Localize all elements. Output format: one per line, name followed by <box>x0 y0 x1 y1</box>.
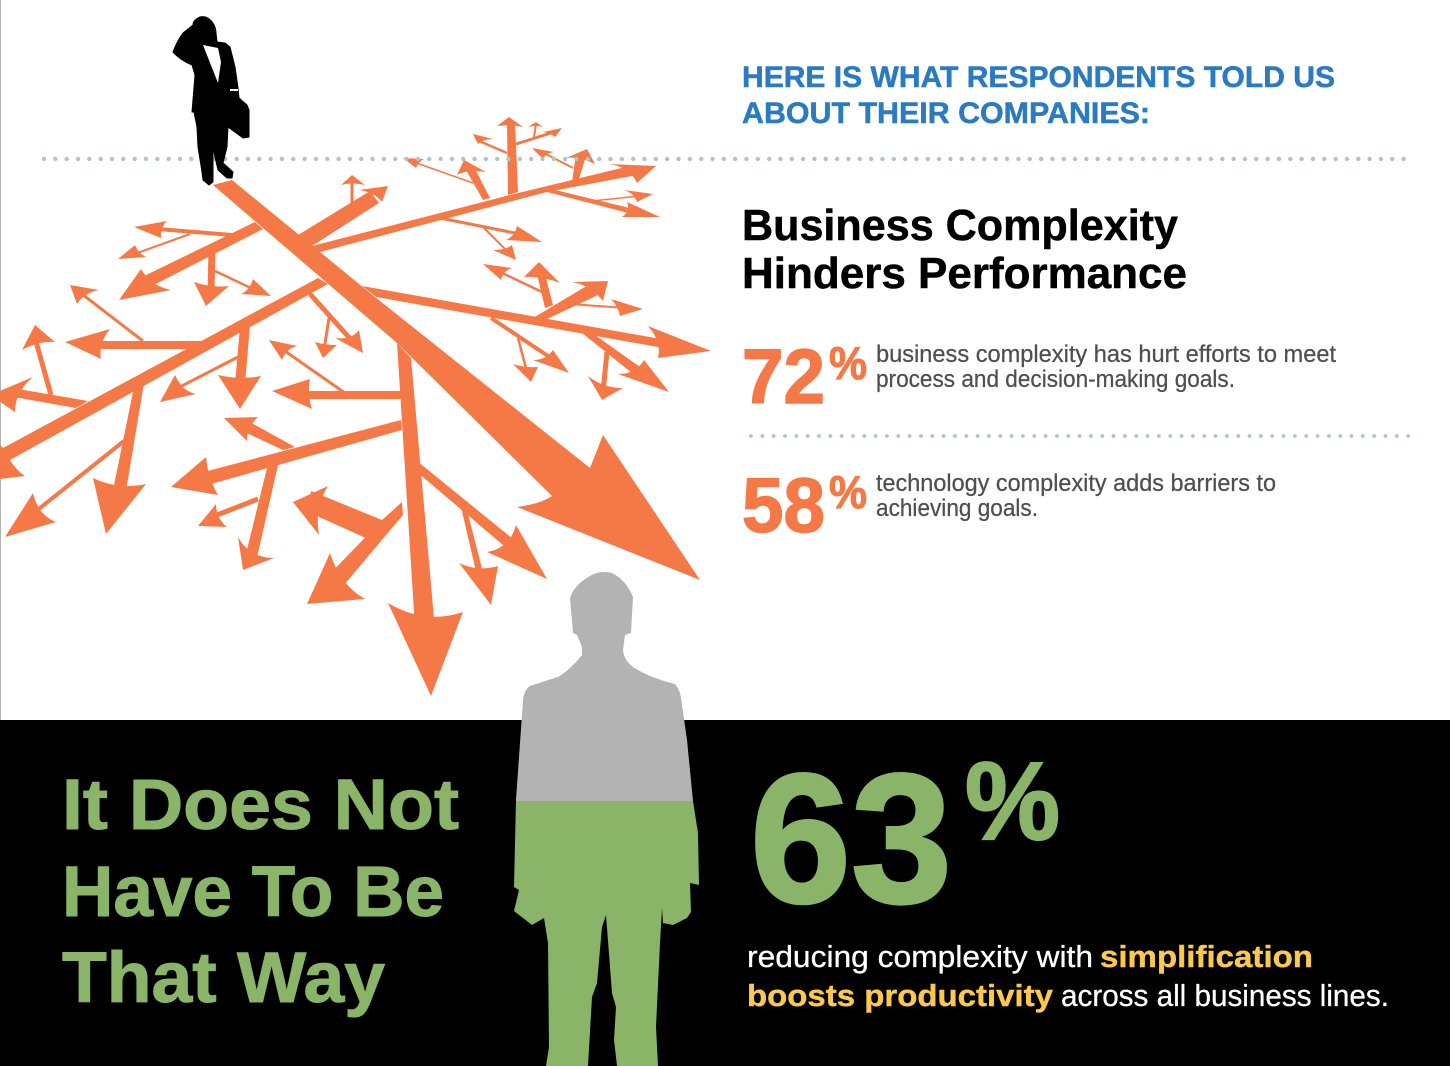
dotted divider middle <box>751 434 1410 438</box>
heading: respondents: ABOUT THEIR COMPANIES: <box>742 97 1150 130</box>
statistic: 63%: 63 <box>750 735 952 941</box>
heading: it does not have to be that way <box>62 766 459 1018</box>
right branch <box>362 262 711 400</box>
lower-middle small branch <box>310 294 363 358</box>
heading: it does not have to be that way: Have To Be <box>62 853 444 932</box>
statistic: 58%: % <box>829 466 867 518</box>
statistic: 72% <box>742 334 1336 420</box>
heading: it does not have to be that way: That Way <box>62 939 386 1018</box>
callout: simplification boosts productivity <box>747 939 1389 1013</box>
arrow tree <box>0 117 711 696</box>
heading: it does not have to be that way: It Does Not <box>62 766 459 845</box>
callout: simplification boosts productivity: reducing complexity with <box>747 939 1093 974</box>
callout: simplification boosts productivity: boosts productivity <box>747 978 1054 1013</box>
statistic: 58%: 58 <box>742 463 825 549</box>
callout: simplification boosts productivity: simplification <box>1100 939 1313 974</box>
upper-left branch <box>118 221 271 306</box>
heading: respondents <box>742 61 1335 130</box>
statistic: 58%: technology complexity adds barriers to <box>876 470 1276 497</box>
statistic: 72%: 72 <box>742 334 825 420</box>
centre downward branch <box>171 340 547 696</box>
upper-right branch <box>298 117 660 260</box>
statistic: 72%: business complexity has hurt efforts to meet <box>876 341 1336 368</box>
dotted divider top <box>44 157 1410 161</box>
statistic: 63% <box>750 735 1060 941</box>
icon: businessman with briefcase <box>173 17 249 185</box>
heading: business complexity <box>742 201 1187 298</box>
statistic: 72%: % <box>829 337 867 389</box>
large left branch <box>0 278 328 537</box>
icon: standing person silhouette, 63% filled <box>514 572 699 1066</box>
black bottom panel <box>0 720 1450 1066</box>
main trunk arrow <box>213 180 700 580</box>
callout: simplification boosts productivity: across all business lines. <box>1061 978 1389 1013</box>
statistic: 58% <box>742 463 1276 549</box>
statistic: 63%: % <box>965 740 1060 863</box>
heading: business complexity: Business Complexity <box>742 201 1179 250</box>
heading: respondents: HERE IS WHAT RESPONDENTS TOLD US <box>742 61 1335 94</box>
heading: business complexity: Hinders Performance <box>742 249 1187 298</box>
statistic: 72%: process and decision-making goals. <box>876 366 1235 393</box>
statistic: 58%: achieving goals. <box>876 495 1038 522</box>
